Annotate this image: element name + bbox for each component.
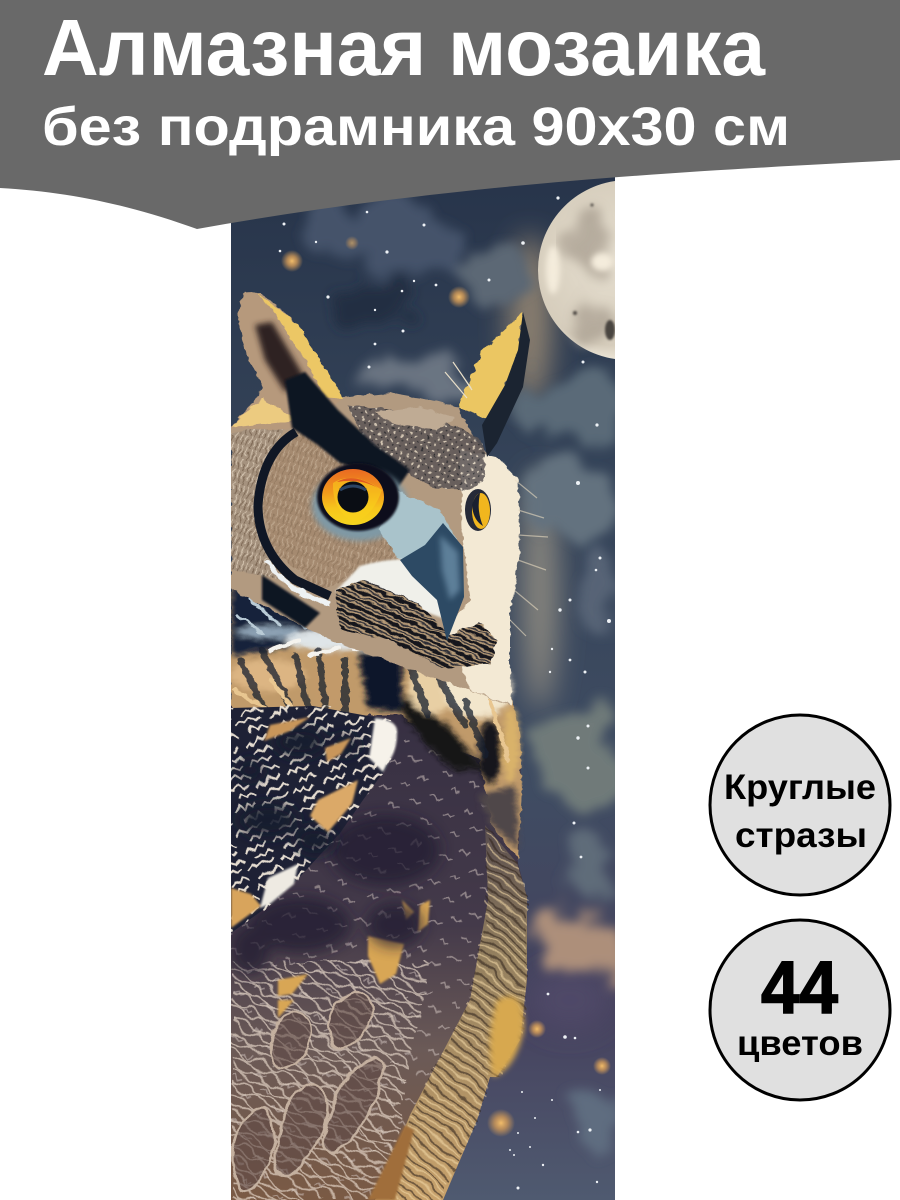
white lower rim (266, 560, 330, 604)
badge: 44 colours (710, 920, 890, 1100)
left wing (231, 706, 397, 933)
subtitle: без подрамника 90x30 см (42, 97, 790, 157)
brown lower feather (368, 1125, 414, 1200)
lower white band (335, 559, 448, 620)
night sky (231, 170, 615, 1200)
head base (231, 393, 517, 705)
far eye (465, 489, 491, 531)
badge: round rhinestones (710, 715, 890, 895)
white wing tips (231, 717, 397, 928)
face disc (262, 432, 400, 588)
owl body (225, 700, 527, 1200)
neck feather streaks (235, 598, 508, 760)
striped collar (335, 580, 497, 668)
gold tail patch (490, 996, 524, 1077)
cheek whiskers (510, 480, 548, 636)
dark shoulder notch (262, 575, 320, 628)
right ear dark (482, 312, 530, 457)
long flight feathers (231, 990, 386, 1192)
beak (400, 523, 464, 641)
owl head (230, 292, 548, 705)
gold wing flecks (278, 900, 430, 1018)
badge: 44 colours: цветов (737, 1024, 863, 1063)
right tail stripes (375, 825, 527, 1200)
right ear gold (457, 312, 523, 420)
moon (538, 181, 615, 359)
ear tufts (445, 362, 472, 398)
badge: round rhinestones: стразы (735, 816, 867, 855)
left ear (230, 292, 343, 430)
title: Алмазная мозаика (42, 3, 765, 92)
blue eye surround (312, 469, 408, 541)
owl (225, 292, 548, 1200)
side of head texture (231, 425, 285, 580)
main eye (317, 463, 399, 531)
feathered head shapes (230, 292, 523, 705)
header banner (0, 0, 900, 229)
badge: 44 colours: 44 (761, 946, 838, 1029)
owl artwork panel (231, 177, 615, 1200)
black ring of the facial disc (258, 432, 330, 596)
body shadow blobs (230, 815, 440, 975)
soft dark ear interior (255, 322, 305, 392)
black brow (285, 372, 410, 492)
feathered neck and shoulder (230, 575, 522, 860)
forehead speckles (347, 405, 486, 490)
badge: round rhinestones: Круглые (724, 768, 876, 807)
stars and glowing orbs (279, 196, 611, 1189)
clouds (300, 194, 615, 1158)
blue brow-to-beak feathers (378, 490, 457, 560)
cream cheek (445, 450, 520, 705)
